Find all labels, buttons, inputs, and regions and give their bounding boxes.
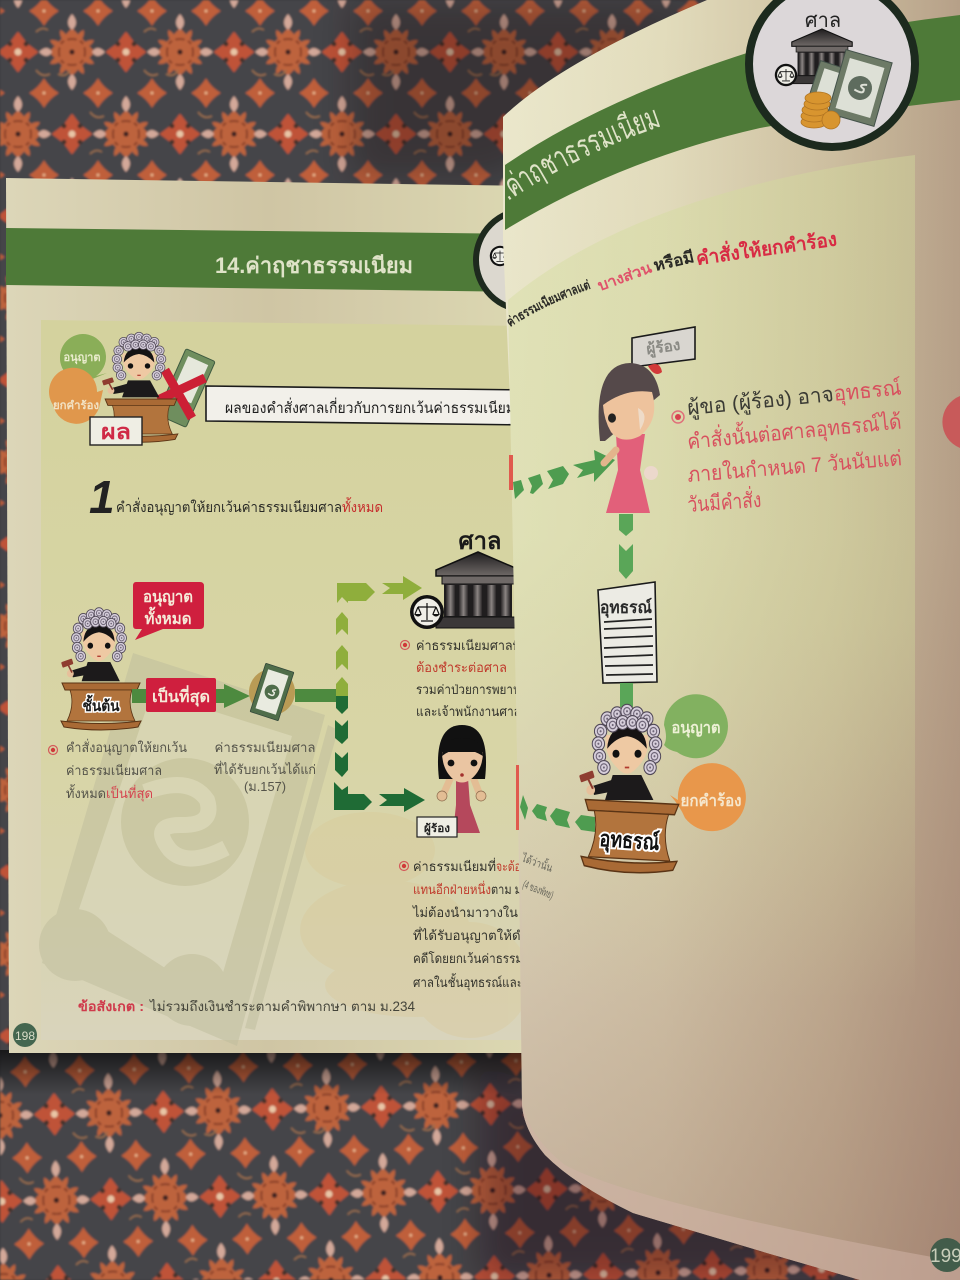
text: fees on behalf of other party: ไม่ต้องนำมาวางใน (412, 905, 518, 920)
watermark: bank note (39, 653, 338, 1046)
curved title: .ค่าฤชาธรรมเนียม (507, 110, 660, 200)
speech bubble: อนุญาต right: อนุญาต (672, 720, 720, 738)
connector: document to judge (620, 683, 633, 707)
small side note: ได้ว่านั้น (519, 849, 556, 875)
label: ศาล: ศาล (805, 10, 841, 32)
right page (503, 0, 960, 1280)
speech bubble: ยกคำร้อง right: ยกคำร้อง (680, 792, 742, 810)
small side note (519, 849, 556, 902)
judge at desk: appeal (579, 704, 680, 875)
speech bubble: อนุญาต (60, 334, 107, 381)
label: ผล: ผล (101, 421, 131, 444)
speech bubble: ยกคำร้อง (49, 368, 103, 424)
bank notes (805, 50, 892, 126)
text: first instance note: เป็นที่สุด (106, 784, 153, 802)
text: court fees: ค่าธรรมเนียมศาลที่ (416, 637, 521, 653)
note: observation: ข้อสังเกต : (78, 999, 144, 1014)
label: เป็นที่สุด: เป็นที่สุด (152, 685, 210, 707)
text: appeal within 7 days: วันมีคำสั่ง (686, 485, 762, 517)
chapter icon: court and money (749, 0, 915, 147)
page number 199 (930, 1238, 960, 1272)
text: court fees: และเจ้าพนักงานศาล (416, 704, 521, 719)
court mini icon (792, 29, 852, 84)
arrow: down to petitioner (334, 696, 425, 812)
text: fees on behalf of other party: ค่าธรรมเนียมที่ (413, 858, 496, 874)
subheading: partial or rejected (508, 225, 838, 327)
section number 1: 1 (89, 471, 115, 523)
text: fees on behalf of other party: แทนอีกฝ่ายหนึ่ง (413, 881, 491, 897)
text: appeal within 7 days (672, 375, 903, 517)
text: appeal within 7 days: ภายในกำหนด 7 วันนับแต่ (687, 446, 903, 487)
heading box: result of court order (206, 386, 530, 425)
right page content panel (508, 155, 915, 1000)
subheading: partial or rejected: หรือมี (652, 247, 696, 275)
text: fees on behalf of other party: คดีโดยยกเว้นค่าธรรม (413, 951, 523, 966)
judge at desk: first instance: ชั้นต้น (82, 694, 120, 715)
page number 198: 198 (15, 1029, 35, 1043)
note: observation: ไม่รวมถึงเงินชำระตามคำพิพากษา ตาม ม.234 (149, 999, 415, 1014)
title: 14.ค่าฤชาธรรมเนียม (215, 253, 413, 278)
text: exempted fees: ค่าธรรมเนียมศาล (214, 740, 316, 755)
arrow: dashed to petitioner (513, 450, 615, 499)
callout: อนุญาตทั้งหมด (133, 582, 204, 640)
arrow: judge to money (132, 678, 250, 712)
subheading: partial or rejected: คำสั่งให้ยกคำร้อง (694, 225, 838, 270)
icon: money on tan circle (249, 663, 295, 721)
speech bubble: อนุญาต: อนุญาต (64, 352, 100, 365)
subheading: partial or rejected: ค่าธรรมเนียมศาลแต่ (508, 279, 591, 327)
arrow: down to appeal document (619, 514, 633, 579)
callout: อนุญาตทั้งหมด: ทั้งหมด (144, 606, 192, 628)
label: ผู้ร้อง: ผู้ร้อง (424, 822, 450, 836)
figure: petitioner on right page (599, 363, 662, 513)
speech bubble: อนุญาต right (664, 694, 728, 758)
text: first instance note (48, 739, 187, 802)
text: appeal within 7 days: ผู้ขอ (ผู้ร้อง) อาจ (686, 383, 835, 421)
arrow: dashed from appeal judge to petitioner (520, 795, 595, 832)
callout: อนุญาตทั้งหมด: อนุญาต (143, 589, 193, 607)
text: appeal within 7 days: อุทธรณ์ (833, 375, 903, 407)
judge at desk: first instance (61, 608, 141, 730)
bottom page margin strip (522, 1100, 960, 1280)
scales badge (775, 64, 797, 86)
subheading: partial or rejected: บางส่วน (596, 259, 655, 295)
red edge circle (942, 396, 960, 448)
small side note: (4 ของพัทย) (521, 879, 555, 902)
document: อุทธรณ์ (598, 582, 657, 683)
chapter icon circle (476, 210, 576, 310)
icon: crossed-out money (157, 349, 215, 427)
text: fees on behalf of other party (400, 858, 528, 991)
watermark: coins (300, 812, 530, 1038)
text: appeal within 7 days: คำสั่งนั้นต่อศาลอุทธรณ์ได้ (686, 406, 903, 455)
judge at desk: result (90, 332, 178, 445)
arrow line: to junction (295, 689, 344, 702)
text: exempted fees: (ม.157) (244, 779, 286, 794)
text: first instance note: ค่าธรรมเนียมศาล (66, 763, 162, 778)
text: fees on behalf of other party: จะต้อง (496, 859, 526, 874)
coins (801, 92, 840, 129)
text: court fees: รวมค่าป่วยการพยาน (416, 682, 521, 697)
label: ผู้ร้อง on right page (632, 327, 695, 367)
icon: court: ศาล (458, 528, 502, 555)
text: court fees: ต้องชำระต่อศาล (416, 660, 507, 675)
text: first instance note: คำสั่งอนุญาตให้ยกเว้น (66, 739, 187, 756)
document: อุทธรณ์: อุทธรณ์ (600, 597, 652, 618)
section heading: ทั้งหมด (342, 497, 383, 515)
page number 198 (13, 1023, 37, 1047)
text: exempted fees: ที่ได้รับยกเว้นได้แก่ (214, 761, 316, 777)
text: fees on behalf of other party: ที่ได้รับอนุญาตให้ดำ (413, 927, 528, 944)
arrow: up to court (336, 576, 422, 697)
heading box: result of court order: ผลของคำสั่งศาลเกี่ยวกับการยกเว้นค่าธรรมเนียม (225, 397, 515, 417)
title band (6, 228, 530, 292)
text: exempted fees (214, 740, 316, 794)
text: court fees (400, 637, 521, 719)
title band (curved) (505, 15, 960, 230)
text: fees on behalf of other party: ศาลในชั้นอุทธรณ์และ (413, 973, 523, 991)
left page content panel (41, 320, 530, 1040)
section heading: คำสั่งอนุญาตให้ยกเว้นค่าธรรมเนียมศาล (116, 498, 342, 516)
red edge lines on left page (509, 455, 519, 830)
icon: court (410, 528, 520, 629)
label: ผู้ร้อง on right page: ผู้ร้อง (645, 337, 682, 359)
text: first instance note: ทั้งหมด (66, 784, 106, 801)
speech bubble: ยกคำร้อง right (670, 763, 746, 831)
speech bubble: ยกคำร้อง: ยกคำร้อง (53, 399, 99, 412)
text: fees on behalf of other party: ตาม ม. (491, 882, 525, 897)
left page (6, 178, 576, 1053)
label: อุทธรณ์ on lectern: อุทธรณ์ (599, 826, 660, 857)
figure: petitioner (417, 725, 486, 837)
